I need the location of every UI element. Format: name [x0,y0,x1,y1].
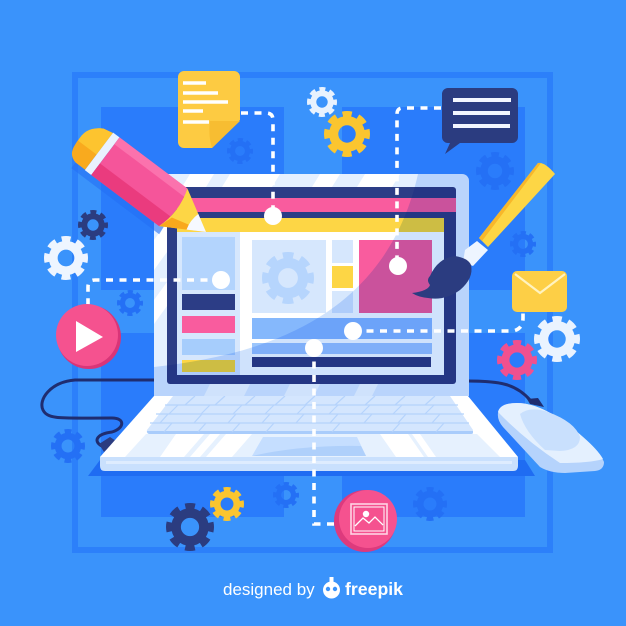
image placeholder with gear [252,240,326,313]
designed by text: designed by [223,580,315,599]
pink feature block [359,240,432,313]
background gears [53,140,534,519]
freepik wordmark: freepik [345,579,403,599]
screen glare overlay [154,174,469,396]
backdrop squares [101,107,525,517]
yellow menu bar [177,218,444,232]
connector nodes [212,207,407,357]
pink header bar [177,198,456,212]
footer credit [223,577,403,599]
laptop base [100,396,518,471]
small tiles [332,240,353,313]
icon: freepik logo [323,577,340,598]
sidebar [177,232,240,375]
icon: speech bubble [442,88,518,154]
lid body [154,174,469,396]
laptop lid [154,174,469,396]
right cable [468,381,530,400]
screen panel [177,218,444,375]
trackpad [252,437,366,456]
backdrop frame [75,75,550,550]
left cable [42,380,156,447]
screen bezel [167,187,456,384]
icon: document note [178,71,240,148]
cable plug [99,437,116,452]
foreground gears [47,89,577,548]
mouse [498,398,604,473]
button: image [334,490,397,552]
connector lines [88,108,523,524]
content bars [252,318,432,367]
deck panel tone [125,434,500,457]
button: play [56,304,121,369]
base deck [100,396,518,457]
keyboard [147,396,473,434]
lid stripes [154,174,400,396]
front highlight [106,461,512,464]
front edge [100,457,518,471]
icon: envelope [512,271,567,312]
icon: paint brush [412,163,555,299]
laptop shadow [88,460,535,476]
icon: pencil [62,118,220,256]
deck stripes [160,434,436,457]
trackpad shade [252,446,366,456]
